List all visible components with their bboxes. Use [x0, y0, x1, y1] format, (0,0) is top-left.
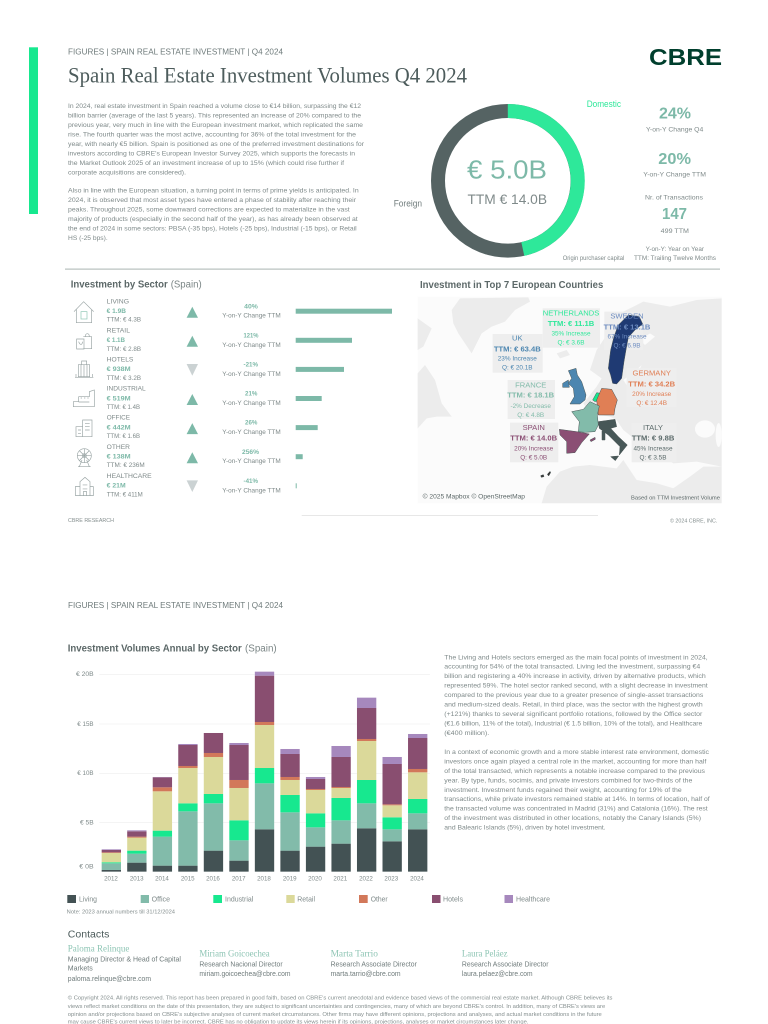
contact: Marta Tarrio: Marta Tarrio [331, 949, 378, 959]
map label: Germany [628, 369, 676, 407]
donut chart: origin of purchaser capital [394, 99, 624, 262]
legend: Office [152, 897, 170, 904]
text block: market overview: the end of 2024 in some sectors: PBSA (-35 bps), Hotels (-25 bps), Industrial (-15 bps), or Retail [68, 226, 357, 233]
contact: Paloma Relinque: Paloma Relinque [68, 944, 129, 954]
text block: sector analysis: and Balearic Islands (5%), driven by hotel investment. [444, 825, 606, 832]
year-on-year changes: 256% [242, 449, 259, 456]
contact: Miriam Goicoechea: Miriam Goicoechea [199, 949, 270, 959]
map label: Netherlands: TTM: € 11.1B [548, 319, 595, 328]
key figures: Y-on-Y: Year on Year [646, 246, 704, 253]
sector list: labels and values: TTM: € 411M [107, 491, 143, 498]
map label: France: Q: € 4.8B [517, 412, 544, 419]
map label: Netherlands: 35% Increase [551, 330, 591, 337]
text block: sector analysis: (€1.6 billion, 11% of the total), Industrial (€ 1.5 billion, 10% of the total), and Healthcare [444, 720, 703, 727]
text block: market overview: investors according to CBRE's European Investor Survey 2025, which supports the forecasts in [68, 150, 355, 158]
text block: sector analysis: (+121%) thanks to several significant portfolio rotations, followed by the Office sector [444, 711, 703, 718]
sector list: labels and values: INDUSTRIAL [107, 386, 146, 393]
x axis labels: 2013 [130, 876, 144, 883]
key figures: TTM: Trailing Twelve Months [634, 255, 716, 262]
map label: Spain: TTM: € 14.0B [510, 434, 558, 443]
footer: CBRE research: CBRE RESEARCH [68, 518, 114, 524]
map label: Spain [510, 423, 558, 461]
map label: Netherlands [543, 309, 599, 347]
contact: Miriam Goicoechea [199, 949, 291, 978]
x axis labels: 2019 [283, 876, 297, 883]
segments: living [102, 828, 427, 872]
sector list: labels and values: TTM: € 1.4B [107, 404, 140, 411]
disclaimer: © Copyright 2024. All rights reserved. This report has been prepared in good faith, based on CBRE's current anecdotal and evidence based views of the commercial real estate market. Although CBRE believes its [68, 994, 613, 1002]
year-on-year changes: Y-on-Y Change TTM [222, 342, 281, 349]
sector list: labels and values: TTM: € 3.2B [107, 375, 141, 382]
legend: Retail [297, 897, 315, 904]
map label: Italy: TTM: € 9.8B [632, 434, 675, 443]
logo: CBRE: CBRE [649, 44, 722, 70]
section label: page one: FIGURES | SPAIN REAL ESTATE INVESTMENT | Q4 2024 [68, 47, 283, 57]
y axis labels: € 5B [80, 819, 94, 826]
text block: market overview: Also in line with the European situation, a turning point in terms of prime yields is anticipated. In [68, 188, 359, 195]
text block: sector analysis: In a context of economic growth and a more stable interest rate environment, domestic [444, 749, 710, 756]
text block: sector analysis: compared to the previous year due to a greater presence of single-asset transactions [444, 692, 704, 699]
map label: Sweden [604, 311, 651, 350]
chart note: Note: 2023 annual numbers till 31/12/2024 [67, 909, 175, 915]
footer: copyright: © 2024 CBRE, INC. [670, 517, 718, 524]
segments: hotels [102, 676, 427, 852]
sector list: labels and values: € 442M [107, 424, 131, 431]
text block: sector analysis: of the total transacted, which represents a notable increase compared to the previous [444, 768, 706, 775]
sector list: labels and values: TTM: € 236M [107, 462, 145, 469]
legend [67, 895, 550, 904]
year-on-year changes [222, 303, 281, 494]
trend arrows [187, 307, 198, 492]
map note: Based on TTM Investment Volume [631, 495, 720, 501]
text block: sector analysis: accounting for 54% of the total transacted. Living led the investment, surpassing €4 [444, 664, 701, 671]
map label: France: TTM: € 18.1B [507, 391, 555, 400]
accent bar [29, 47, 38, 214]
section label: page two: FIGURES | SPAIN REAL ESTATE INVESTMENT | Q4 2024 [68, 600, 283, 610]
map label: France: -2% Decrease [510, 403, 551, 410]
text block: market overview: In 2024, real estate investment in Spain reached a volume close to €14 billion, surpassing the €12 [68, 103, 361, 110]
map label: Italy [632, 423, 675, 461]
x axis labels: 2020 [308, 876, 322, 883]
map label: Germany: TTM: € 34.2B [628, 380, 676, 389]
segments: retail [102, 725, 427, 862]
year-on-year changes: -41% [244, 478, 258, 485]
key figures [634, 106, 716, 262]
map label: Germany: Q: € 12.4B [636, 400, 667, 407]
x axis labels: 2023 [384, 876, 399, 883]
heading: contacts: Contacts [68, 929, 109, 940]
legend: Industrial [225, 897, 254, 904]
sector list: labels and values: € 938M [107, 366, 131, 373]
sector list: labels and values: OTHER [107, 444, 130, 451]
sector list: labels and values: OFFICE [107, 415, 131, 422]
text block: market overview: majority of products (especially in the second half of the year), as has already been observed at [68, 216, 358, 223]
country: Netherlands [593, 393, 600, 402]
map label: Sweden: 67% Increase [607, 334, 647, 341]
donut chart: origin of purchaser capital: Foreign [394, 199, 422, 209]
text block: sector analysis: billion and registering a 40% increase in activity, driven by alternative products, which [444, 673, 706, 680]
European countries [541, 315, 643, 477]
contact: Laura Pelaez [462, 949, 549, 978]
map label: UK: 23% Increase [498, 356, 537, 363]
sector list: labels and values: € 1.9B [107, 308, 126, 315]
text block: sector analysis: year. By type, funds, socimis, and private investors combined for two-thirds of the [444, 777, 693, 784]
heading: annual volumes: Investment Volumes Annual by Sector [68, 643, 242, 654]
sector list: labels and values: HOTELS [107, 356, 134, 364]
sector list: labels and values: TTM: € 2.8B [107, 346, 141, 353]
text block: sector analysis: transactions, while private investors remained stable at 14%. In terms of location, half of [444, 796, 710, 803]
x axis labels: 2021 [333, 876, 348, 883]
contact: Paloma Relinque [68, 944, 181, 983]
sector list: labels and values: TTM: € 4.3B [107, 317, 141, 324]
x axis labels: 2022 [359, 876, 373, 883]
map label: Spain: SPAIN [523, 423, 545, 432]
text block: sector analysis: (€400 million). [444, 730, 489, 737]
sector list: labels and values: € 21M [107, 483, 126, 490]
text block: market overview: 2024, it is observed that most asset types have entered a phase of stability after reaching their [68, 197, 357, 204]
sector icons [73, 302, 94, 496]
sector list: labels and values: € 519M [107, 395, 131, 402]
map label: France: FRANCE [515, 381, 546, 390]
contact: Marta Tarrio: Research Associate Director [331, 960, 417, 969]
text block: market overview: previous year, very much in line with the European investment market, which replicated the same [68, 122, 363, 129]
donut chart: origin of purchaser capital: TTM € 14.0B [468, 192, 547, 207]
text block: sector analysis: investment. Investment funds regained their weight, accounting for 19% of the [444, 787, 682, 794]
map label: UK: Q: € 20.1B [502, 365, 533, 372]
disclaimer: opinion and/or projections based on CBRE's subjective analyses of current market circumstances. Other firms may have different opinions, projections and analyses, and actual market conditions in the future [68, 1012, 602, 1018]
panel: contacts [68, 929, 549, 983]
year-on-year changes: 26% [245, 420, 258, 427]
sector list: labels and values: RETAIL [107, 327, 130, 334]
y axis labels: € 15B [77, 721, 94, 728]
x axis labels: 2024 [410, 876, 424, 883]
country: Spain [541, 429, 595, 477]
key figures: 147 [662, 206, 687, 223]
contact: Laura Pelaez: Laura Peláez [462, 949, 508, 959]
panel: investment by sector [71, 279, 392, 498]
year-on-year changes: 40% [244, 303, 258, 310]
donut chart: origin of purchaser capital: € 5.0B [467, 154, 547, 184]
heading: European countries: Investment in Top 7 European Countries [420, 280, 604, 291]
country: United Kingdom [563, 368, 586, 404]
contact: Laura Pelaez: laura.pelaez@cbre.com [462, 969, 533, 978]
segments: office [102, 783, 427, 870]
text block: market overview: the Market Outlook 2025 of an investment increase of up to 15% (which could rise further if [68, 160, 344, 167]
sector list: labels and values: TTM: € 1.6B [107, 433, 140, 440]
text block: sector analysis: the transacted volume was concentrated in Madrid (31%) and Catalonia (16%). The rest [444, 806, 708, 813]
map label: Italy: 45% Increase [633, 445, 673, 452]
heading: investment by sector: Investment by Sector [71, 279, 168, 290]
key figures: Y-on-Y Change Q4 [646, 126, 704, 133]
heading: annual volumes: (Spain) [245, 643, 277, 654]
text block: market overview: peaks. Throughout 2025, some downward corrections are expected to materialize in the vast [68, 206, 350, 214]
disclaimer: views reflect market conditions on the date of this presentation, they are subject to significant uncertainties and contingencies, many of which are beyond CBRE's control. In addition, many of CBRE's views are [68, 1004, 605, 1010]
segments: other [102, 722, 427, 853]
contact: Miriam Goicoechea: miriam.goicoechea@cbre.com [199, 969, 291, 978]
y axis labels: € 0B [79, 864, 94, 871]
year-on-year changes: Y-on-Y Change TTM [222, 400, 281, 407]
text block: market overview: HS (-25 bps). [68, 235, 108, 242]
year-on-year changes: -21% [244, 362, 258, 368]
map label: Spain: 20% Increase [514, 445, 554, 452]
key figures: Y-on-Y Change TTM [643, 172, 706, 179]
panel: top 7 European countries map [418, 280, 722, 503]
legend: Living [79, 897, 97, 904]
text block: market overview: year, with nearly €5 billion. Spain is positioned as one of the preferred investment destinations for [68, 141, 365, 148]
text block: sector analysis: investors once again played a central role in the market, accounting for more than half [444, 758, 706, 765]
map label: Italy: Q: € 3.5B [640, 454, 666, 461]
x axis labels [104, 876, 424, 883]
text block: market overview: billion barrier (average of the last 5 years). This represented an increase of 20% compared to the [68, 112, 361, 120]
map label: Germany: 20% Increase [632, 391, 672, 398]
x axis labels: 2012 [104, 876, 118, 883]
contact: Miriam Goicoechea: Research Nacional Director [199, 960, 283, 969]
disclaimer [68, 994, 613, 1024]
map label: UK: UK [512, 334, 523, 343]
text block: market overview: rise. The fourth quarter was the most active, accounting for 36% of the total investment for the [68, 132, 356, 138]
y axis labels: € 10B [77, 770, 94, 777]
contact: Marta Tarrio [331, 949, 417, 978]
map label: Netherlands: NETHERLANDS [543, 309, 599, 318]
year-on-year changes: Y-on-Y Change TTM [222, 487, 281, 494]
sector list: labels and values: LIVING [107, 298, 129, 305]
year-on-year changes: Y-on-Y Change TTM [222, 371, 281, 378]
key figures: 24% [659, 106, 691, 123]
segments: industrial [102, 768, 427, 863]
country: France [572, 402, 599, 432]
year-on-year changes: Y-on-Y Change TTM [222, 458, 281, 465]
text block: sector analysis: of the investment was distributed in other locations, notably the Canary Islands (5%) [444, 815, 701, 822]
year-on-year changes: 121% [244, 332, 259, 339]
map label: Sweden: SWEDEN [610, 311, 644, 320]
contact: Paloma Relinque: Markets [68, 964, 93, 973]
year-on-year changes: Y-on-Y Change TTM [222, 313, 281, 320]
key figures: Nr. of Transactions [645, 195, 703, 202]
year-on-year changes: 21% [245, 391, 258, 398]
country: Sweden [608, 315, 643, 384]
sector list: labels and values: € 1.1B [107, 337, 125, 344]
map label: Sweden: TTM: € 13.1B [604, 322, 651, 331]
segments: healthcare [102, 672, 427, 850]
x axis labels: 2018 [257, 876, 271, 883]
legend: Healthcare [516, 897, 550, 904]
text block: market overview: corporate acquisitions are considered). [68, 170, 186, 177]
map of Europe [418, 297, 722, 503]
country: Germany [597, 388, 617, 415]
map label: UK: TTM: € 63.4B [494, 345, 541, 354]
x axis labels: 2016 [206, 876, 220, 883]
text block: sector analysis: and medium-sized deals. Retail, in third place, was the sector with the highest growth [444, 702, 703, 708]
text block: market overview [68, 103, 365, 242]
sector list: labels and values: € 138M [107, 454, 131, 460]
map label: Germany: GERMANY [632, 369, 671, 378]
y axis labels: € 20B [76, 671, 94, 678]
country: Italy [598, 419, 627, 461]
map label: Spain: Q: € 5.0B [520, 454, 547, 461]
donut chart: origin of purchaser capital: Domestic [587, 99, 621, 109]
map label: France [507, 381, 555, 419]
donut chart: origin of purchaser capital: Origin purchaser capital [563, 255, 624, 262]
contact: Paloma Relinque: Managing Director & Head of Capital [68, 955, 181, 964]
key figures: 499 TTM [661, 228, 689, 235]
sector list: labels and values [107, 298, 152, 498]
y axis labels [76, 671, 94, 871]
legend: Hotels [443, 897, 464, 904]
x axis labels: 2014 [155, 876, 169, 883]
text block: sector analysis [444, 654, 710, 832]
map attribution: © 2025 Mapbox © OpenStreetMap [423, 493, 525, 501]
legend: Other [371, 897, 388, 904]
map label: Italy: ITALY [643, 423, 663, 432]
year-on-year changes: Y-on-Y Change TTM [222, 429, 281, 436]
text block: sector analysis: represented 59%. The hotel sector ranked second, with a slight decrease in investment [444, 683, 708, 690]
map label: Sweden: Q: € 6.9B [614, 343, 640, 350]
bar chart: sector volumes [296, 309, 392, 488]
key figures: 20% [658, 151, 691, 168]
contact: Laura Pelaez: Research Associate Director [462, 960, 549, 969]
text block: sector analysis: The Living and Hotels sectors emerged as the main focal points of investment in 2024, [444, 654, 708, 661]
map label: Netherlands: Q: € 3.6B [558, 340, 584, 347]
title: Spain Real Estate Investment Volumes Q4 2024 [68, 63, 467, 88]
contact: Marta Tarrio: marta.tarrio@cbre.com [331, 969, 401, 978]
map label: UK [494, 334, 541, 372]
stacked bar chart: annual volumes by sector [76, 671, 430, 883]
x axis labels: 2015 [181, 876, 195, 883]
contact: Paloma Relinque: paloma.relinque@cbre.com [68, 974, 151, 983]
x axis labels: 2017 [232, 876, 246, 883]
heading: investment by sector: (Spain) [171, 279, 202, 290]
sector list: labels and values: HEALTHCARE [107, 473, 152, 480]
